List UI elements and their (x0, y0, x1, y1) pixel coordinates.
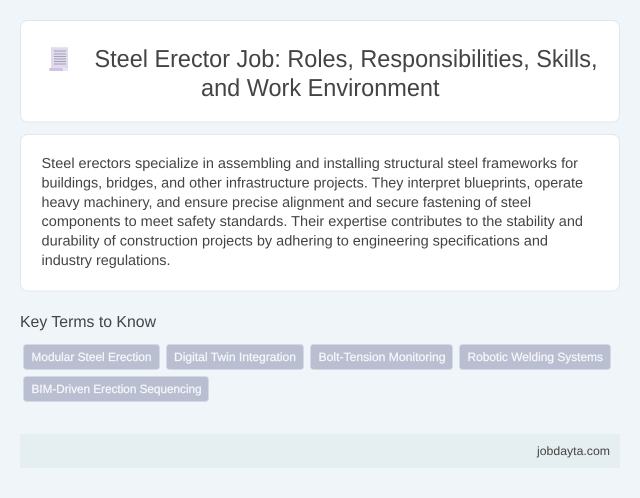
heading: key terms: Key Terms to Know (20, 314, 156, 331)
text block: description: components to meet safety standards. Their expertise contributes to the stability and (42, 214, 583, 230)
icon: document scroll (49, 47, 68, 71)
text block: description: Steel erectors specialize in assembling and installing structural steel frameworks for (42, 156, 578, 172)
chip: bim-driven erection sequencing (24, 376, 208, 402)
chip: bolt-tension monitoring: Bolt-Tension Monitoring (318, 350, 446, 364)
title: and Work Environment (201, 75, 440, 102)
chip: bim-driven erection sequencing: BIM-Driven Erection Sequencing (32, 382, 202, 396)
chip: digital twin integration: Digital Twin Integration (174, 350, 296, 364)
chip: modular steel erection (24, 344, 160, 370)
chip: digital twin integration (166, 344, 304, 370)
text block: description: industry regulations. (42, 253, 170, 269)
text block: description (42, 156, 583, 269)
panel: header (20, 20, 620, 122)
chip: robotic welding systems (460, 344, 610, 370)
chip: modular steel erection: Modular Steel Erection (32, 350, 152, 364)
text block: description: durability of construction projects by adhering to engineering specifications and (42, 234, 548, 250)
title (94, 46, 598, 102)
footer source text: jobdayta.com (536, 444, 610, 458)
text block: description: heavy machinery, and ensure precise alignment and secure fastening of steel (42, 195, 531, 211)
text block: description: buildings, bridges, and other infrastructure projects. They interpret blueprints, operate (42, 176, 583, 192)
chip: robotic welding systems: Robotic Welding Systems (468, 350, 603, 364)
panel: description (20, 134, 620, 291)
chip: bolt-tension monitoring (310, 344, 452, 370)
title: Steel Erector Job: Roles, Responsibilities, Skills, (94, 46, 598, 73)
footer (20, 434, 620, 468)
chips: key terms (24, 344, 610, 402)
